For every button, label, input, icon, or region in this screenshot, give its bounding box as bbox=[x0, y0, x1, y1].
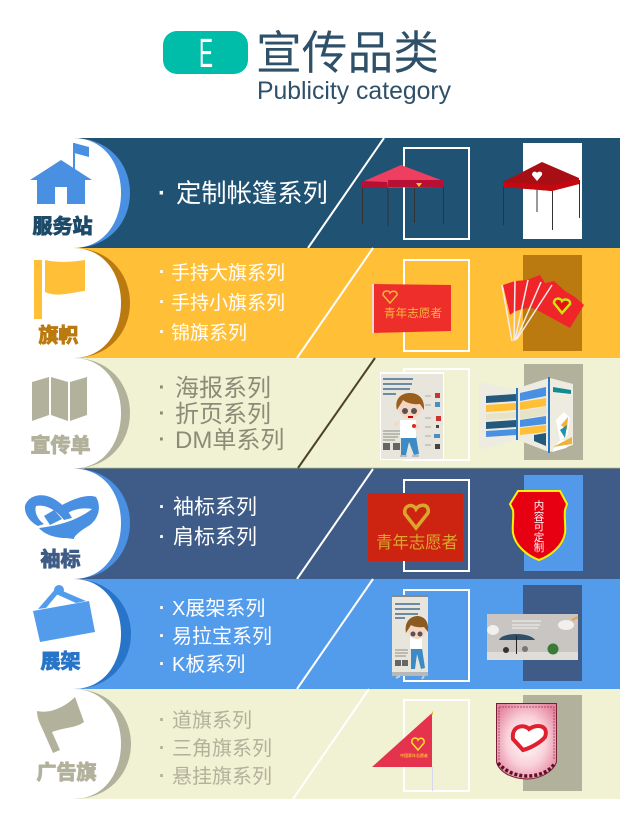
photo: red armband: 青年志愿者 bbox=[376, 533, 458, 552]
list: display series: 易拉宝系列 bbox=[172, 625, 272, 648]
icon: hanging sign bbox=[33, 585, 95, 642]
list: print series bbox=[159, 375, 284, 454]
list: display series bbox=[159, 597, 272, 676]
panel: 宣传单 bbox=[0, 358, 620, 468]
frame bbox=[404, 590, 469, 681]
list: flag types: · bbox=[159, 710, 165, 731]
icon: waving flag bbox=[37, 697, 84, 753]
photo: triangle flag: 中国青年志愿者 bbox=[400, 752, 428, 759]
panel: 展架 bbox=[0, 579, 620, 689]
label: 展架: 展架 bbox=[40, 650, 80, 673]
list: display series: · bbox=[159, 626, 165, 647]
photo: shield badge: 可 bbox=[534, 521, 544, 533]
photo: folded leaflet bbox=[479, 377, 573, 453]
photo: roll-up banner bbox=[392, 595, 428, 679]
list: flag series: 锦旗系列 bbox=[171, 322, 247, 344]
photo: red tent bbox=[362, 165, 444, 226]
list: tent series: 定制帐篷系列 bbox=[176, 180, 328, 208]
list: badge series: 肩标系列 bbox=[173, 526, 257, 549]
badge: E: E bbox=[199, 30, 213, 76]
list: tent series: · bbox=[158, 180, 166, 207]
label: 宣传单: 宣传单 bbox=[30, 434, 90, 457]
panel backing bbox=[524, 364, 583, 460]
panel backing bbox=[523, 695, 582, 791]
photo: triangle flag bbox=[372, 711, 433, 791]
list: print series: 折页系列 bbox=[175, 401, 271, 428]
list: badge series: · bbox=[159, 527, 165, 548]
list: print series: · bbox=[159, 429, 165, 451]
icon: flag bbox=[34, 260, 85, 319]
photo: volunteer flag bbox=[372, 284, 451, 333]
frame bbox=[404, 260, 469, 351]
photo: shield badge: 容 bbox=[534, 510, 545, 523]
list: badge series: · bbox=[159, 497, 165, 518]
icon: armband bbox=[25, 495, 99, 539]
frame bbox=[404, 148, 469, 239]
list: flag series: · bbox=[159, 322, 165, 343]
frame bbox=[404, 700, 469, 791]
icon: folded map bbox=[32, 377, 87, 421]
list: badge series: 袖标系列 bbox=[173, 496, 257, 519]
list: flag types: · bbox=[159, 766, 165, 787]
label: 旗帜: 旗帜 bbox=[38, 324, 78, 347]
list: flag series: 手持大旗系列 bbox=[171, 262, 285, 284]
heading: Chinese title: 宣传品类 bbox=[256, 27, 439, 79]
frame bbox=[404, 369, 469, 460]
photo: shield badge: 内 bbox=[534, 499, 544, 512]
photo: volunteer flag: 青年志愿者 bbox=[384, 306, 442, 320]
list: flag series: · bbox=[159, 262, 165, 283]
photo: shield badge: 制 bbox=[534, 541, 544, 554]
list: display series: X展架系列 bbox=[172, 597, 265, 620]
label: 袖标: 袖标 bbox=[40, 548, 80, 571]
list: display series: K板系列 bbox=[172, 653, 245, 676]
title block bbox=[163, 27, 451, 105]
photo: shield badge bbox=[510, 491, 567, 560]
photo: red armband bbox=[368, 493, 463, 561]
panel: 袖标 bbox=[0, 468, 620, 579]
photo: dark red tent bbox=[503, 162, 580, 230]
list: flag types: · bbox=[159, 738, 165, 759]
photo: poster bbox=[380, 372, 444, 460]
photo: illustrated banner bbox=[487, 614, 578, 660]
list: flag types bbox=[159, 709, 272, 788]
panel backing bbox=[523, 143, 582, 239]
badge: E bbox=[163, 30, 248, 76]
photo: shield badge: 定 bbox=[534, 531, 545, 544]
list: flag types: 悬挂旗系列 bbox=[172, 765, 272, 788]
panel: 服务站 bbox=[0, 138, 620, 248]
photo: hand flags bbox=[502, 275, 584, 341]
list: flag types: 道旗系列 bbox=[172, 709, 252, 732]
list: print series: · bbox=[159, 403, 165, 425]
label: 广告旗: 广告旗 bbox=[36, 761, 96, 784]
list: flag series: · bbox=[159, 292, 165, 313]
list: flag series: 手持小旗系列 bbox=[171, 292, 285, 314]
label: 服务站: 服务站 bbox=[32, 215, 92, 238]
list: flag types: 三角旗系列 bbox=[172, 737, 272, 760]
list: display series: · bbox=[159, 654, 165, 675]
panel: 广告旗 bbox=[0, 689, 620, 799]
list: print series: · bbox=[159, 377, 165, 399]
panel backing bbox=[523, 255, 582, 351]
list: badge series bbox=[159, 496, 257, 549]
panel: 旗帜 bbox=[0, 248, 620, 358]
photo: pink pennant bbox=[496, 704, 556, 779]
list: print series: 海报系列 bbox=[175, 375, 271, 402]
list: flag series bbox=[159, 262, 285, 344]
panel backing bbox=[523, 585, 582, 681]
list: display series: · bbox=[159, 598, 165, 619]
list: print series: DM单系列 bbox=[175, 427, 284, 454]
icon: house with flag bbox=[30, 143, 92, 204]
heading: English subtitle: Publicity category bbox=[257, 77, 451, 105]
frame bbox=[404, 480, 469, 571]
panel backing bbox=[524, 475, 583, 571]
